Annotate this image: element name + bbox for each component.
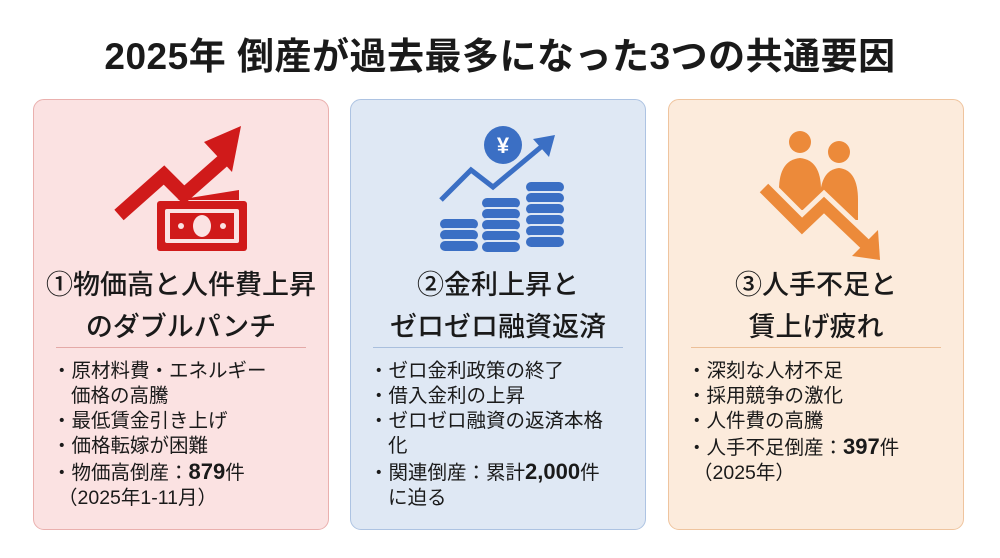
heading: ①物価高と人件費上昇 <box>46 270 316 300</box>
heading <box>46 270 316 342</box>
bullet list <box>52 360 267 509</box>
icon: yen coins <box>439 126 564 252</box>
bullet list: ・ゼロ金利政策の終了 <box>369 360 564 382</box>
bullet list: ・価格転嫁が困難 <box>52 435 208 457</box>
panel: inflation <box>33 99 329 530</box>
bullet list: ・ゼロゼロ融資の返済本格 <box>369 410 603 432</box>
bullet list: ・人件費の高騰 <box>687 410 824 432</box>
bullet list <box>687 360 899 484</box>
panel: labor <box>668 99 964 530</box>
icon: rising arrow and bill <box>114 126 247 251</box>
panel: interest <box>350 99 646 530</box>
bullet list: ・原材料費・エネルギー <box>52 360 267 382</box>
bullet list: ・物価高倒産：879件 <box>52 459 245 484</box>
bullet list: ・採用競争の激化 <box>687 385 843 407</box>
heading: ゼロゼロ融資返済 <box>390 312 606 342</box>
bullet list: に迫る <box>388 487 447 509</box>
icon: people and falling arrow <box>760 131 880 260</box>
heading: ②金利上昇と <box>417 270 579 300</box>
bullet list: ・人手不足倒産：397件 <box>687 434 899 459</box>
bullet list: ・借入金利の上昇 <box>369 385 525 407</box>
icon: yen coins: ¥ <box>497 133 510 158</box>
title: 2025年 倒産が過去最多になった3つの共通要因 <box>104 36 896 77</box>
bullet list: （2025年1-11月） <box>58 487 217 509</box>
bullet list: 化 <box>388 435 408 457</box>
heading <box>390 270 606 342</box>
heading: ③人手不足と <box>735 270 897 300</box>
bullet list: （2025年） <box>693 462 795 484</box>
bullet list <box>369 360 603 509</box>
heading: のダブルパンチ <box>86 312 276 342</box>
bullet list: ・関連倒産：累計2,000件 <box>369 459 600 484</box>
bullet list: 価格の高騰 <box>71 385 169 407</box>
bullet list: ・最低賃金引き上げ <box>52 410 228 432</box>
heading <box>735 270 897 342</box>
heading: 賃上げ疲れ <box>748 312 884 342</box>
bullet list: ・深刻な人材不足 <box>687 360 843 382</box>
